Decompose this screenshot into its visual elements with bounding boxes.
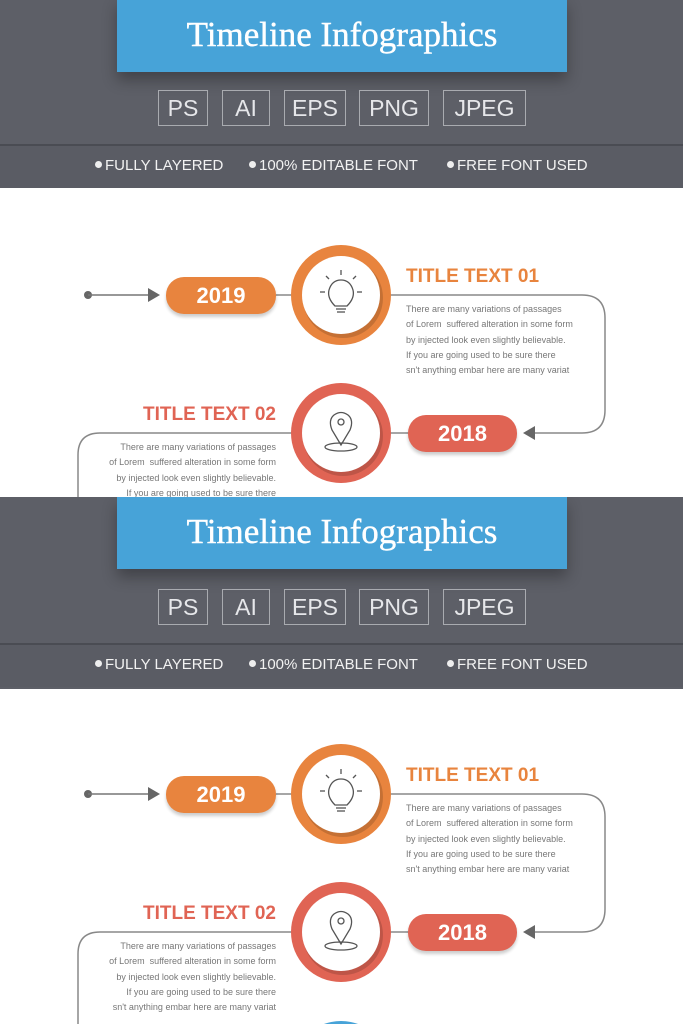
- pill 2018: 2018: [438, 920, 487, 945]
- text block 02: of Lorem suffered alteration in some form: [109, 956, 276, 966]
- feature bullets: [95, 656, 588, 673]
- text block 01: [406, 803, 573, 874]
- pill 2018: [408, 914, 517, 951]
- text block 01: of Lorem suffered alteration in some form: [406, 319, 573, 329]
- pill 2018: [408, 415, 517, 452]
- format tags: PS: [168, 95, 198, 121]
- text block 02: sn't anything embar here are many variat: [113, 1002, 276, 1012]
- format tags: EPS: [292, 594, 338, 620]
- format tags: PS: [168, 594, 198, 620]
- pill 2019: 2019: [197, 782, 245, 807]
- text block 01: If you are going used to be sure there: [406, 350, 556, 360]
- title 01: TITLE TEXT 01: [406, 765, 539, 786]
- format tags: AI: [235, 594, 257, 620]
- text block 01: sn't anything embar here are many variat: [406, 864, 569, 874]
- pill 2019: [166, 277, 276, 314]
- title: Timeline Infographics: [187, 512, 497, 551]
- format tags: [158, 90, 526, 126]
- title: Timeline Infographics: [187, 15, 497, 54]
- pill 2019: [166, 776, 276, 813]
- format tags: EPS: [292, 95, 338, 121]
- text block 01: by injected look even slightly believable.: [406, 335, 566, 345]
- timeline: [77, 744, 606, 1024]
- panel: top copy: [0, 0, 683, 497]
- text block 01: of Lorem suffered alteration in some form: [406, 818, 573, 828]
- title 02: TITLE TEXT 02: [143, 404, 276, 425]
- text block 01: by injected look even slightly believable.: [406, 834, 566, 844]
- text block 02: If you are going used to be sure there: [126, 987, 276, 997]
- feature bullets: FREE FONT USED: [457, 157, 588, 174]
- text block 02: [109, 941, 276, 1012]
- format tags: JPEG: [454, 594, 515, 620]
- title 02: TITLE TEXT 02: [143, 903, 276, 924]
- header band: [0, 0, 683, 188]
- format tags: AI: [235, 95, 257, 121]
- title: [117, 497, 567, 569]
- text block 01: There are many variations of passages: [406, 304, 562, 314]
- feature bullets: FREE FONT USED: [457, 656, 588, 673]
- header band: [0, 497, 683, 689]
- connector lines: [77, 245, 606, 497]
- text block 02: by injected look even slightly believable.: [116, 972, 276, 982]
- text block 01: If you are going used to be sure there: [406, 849, 556, 859]
- format tags: PNG: [369, 594, 419, 620]
- pill 2019: 2019: [197, 283, 245, 308]
- text block 01: There are many variations of passages: [406, 803, 562, 813]
- feature bullets: 100% EDITABLE FONT: [259, 157, 418, 174]
- text block 02: of Lorem suffered alteration in some form: [109, 457, 276, 467]
- format tags: JPEG: [454, 95, 515, 121]
- feature bullets: 100% EDITABLE FONT: [259, 656, 418, 673]
- text block 02: [109, 442, 276, 497]
- text block 02: There are many variations of passages: [120, 442, 276, 452]
- format tags: PNG: [369, 95, 419, 121]
- text block 01: [406, 304, 573, 375]
- title 01: TITLE TEXT 01: [406, 266, 539, 287]
- timeline: [77, 245, 606, 497]
- text block 01: sn't anything embar here are many variat: [406, 365, 569, 375]
- panel: bottom copy: [0, 497, 683, 1024]
- title: [117, 0, 567, 72]
- format tags: [158, 589, 526, 625]
- connector lines: [77, 744, 606, 1024]
- pill 2018: 2018: [438, 421, 487, 446]
- feature bullets: FULLY LAYERED: [105, 656, 223, 673]
- feature bullets: [95, 157, 588, 174]
- text block 02: There are many variations of passages: [120, 941, 276, 951]
- text block 02: by injected look even slightly believable.: [116, 473, 276, 483]
- feature bullets: FULLY LAYERED: [105, 157, 223, 174]
